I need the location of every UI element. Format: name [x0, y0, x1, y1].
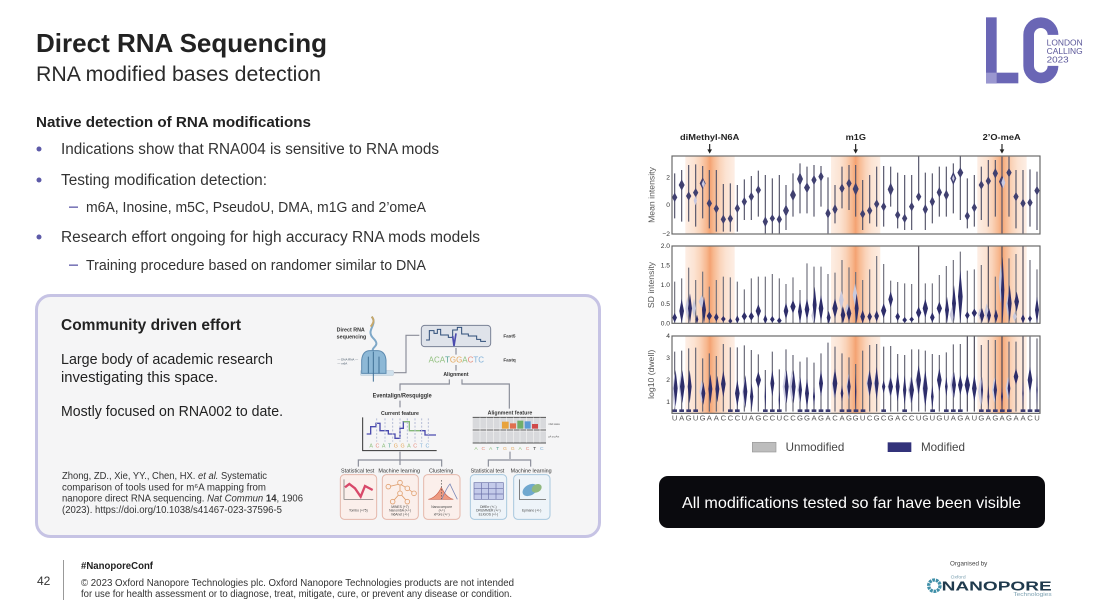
panel: community driven effort — [36, 296, 600, 536]
card: machine learning: m6Anet (+/-) — [391, 512, 409, 516]
logo: London Calling 2023: 2023 — [1047, 54, 1069, 64]
bullet: RNA004: Indications show that RNA004 is sensitive to RNA mods — [61, 141, 439, 158]
logo: London Calling 2023: LONDON — [1047, 38, 1083, 48]
label: current feature: Current feature — [381, 411, 419, 417]
axis ticks: −2 — [662, 231, 670, 238]
axis ticks: 2 — [666, 174, 670, 181]
card: machine learning: MINES (+7) — [391, 505, 409, 509]
footer: copyright: © 2023 Oxford Nanopore Technologies plc. Oxford Nanopore Technologies products are not intended — [81, 578, 514, 589]
legend: Modified — [921, 441, 965, 454]
chart: current feature: ACATGGACTC — [369, 443, 429, 449]
subtitle: RNA modified bases detection — [36, 63, 321, 86]
callout: All modifications tested so far have been visible — [682, 495, 1021, 512]
card: machine learning — [382, 475, 418, 519]
heading: native detection: Native detection of RNA modifications — [36, 114, 311, 131]
sub-bullet: mods tested: m6A, Inosine, m5C, PseudoU, DMA, m1G and 2’omeA — [86, 200, 426, 216]
sub-bullet: training: Training procedure based on randomer similar to DNA — [86, 258, 426, 274]
method labels: Clustering — [429, 469, 453, 475]
card: statistical test 2: DRUMMER (+/-) — [476, 509, 501, 513]
logo: Oxford Nanopore Technologies: Organised by — [950, 560, 988, 567]
label: Fast5: Fast5 — [503, 333, 516, 338]
chart: alignment feature: A C A T G G A C T C — [474, 446, 544, 452]
sequence: ACATGGACTC — [429, 355, 484, 364]
card: clustering: (+/-) — [439, 509, 445, 513]
axis ticks: 3 — [666, 355, 670, 362]
card: machine learning 2 — [514, 475, 550, 519]
branch arrows — [358, 452, 531, 467]
axis label: log10 (dwell) — [646, 350, 656, 399]
panel text: Mostly focused on RNA002 to date. — [61, 404, 283, 420]
citation: Zhong, ZD., Xie, YY., Chen, HX. et al. Systematic — [62, 471, 267, 482]
chart: violin plots by nucleotide — [646, 132, 1040, 454]
logo: London Calling 2023 — [986, 17, 1083, 83]
annotation labels with arrows: diMethyl-N6A — [680, 132, 739, 142]
footer: copyright — [81, 578, 514, 600]
callout — [659, 476, 1045, 528]
method labels: Statistical test — [341, 469, 375, 475]
citation: (2023). https://doi.org/10.1038/s41467-023-37596-5 — [62, 505, 283, 516]
chart: alignment feature — [473, 417, 561, 452]
citation: comparison of tools used for m⁶A mapping from — [62, 482, 266, 494]
label: alignment feature: Alignment feature — [488, 410, 532, 416]
footer: copyright: for use for health assessment or to diagnose, treat, mitigate, cure, or prevent any disease or condition. — [81, 589, 512, 600]
logo: Oxford Nanopore Technologies: Technologies — [1013, 592, 1052, 598]
method labels — [341, 469, 552, 475]
card: statistical test 2 — [470, 475, 507, 519]
legend — [752, 441, 965, 454]
axis ticks: 2.0 — [661, 243, 670, 250]
annotation labels with arrows: m1G — [846, 132, 866, 142]
panel heading: Community driven effort — [61, 317, 241, 334]
icon: pore with RNA strand — [337, 317, 393, 382]
panel: SD intensity — [646, 243, 1040, 327]
card: statistical test 2: DiffErr (+/-) — [480, 505, 497, 509]
diagram: tool workflow: sequencing — [337, 335, 366, 341]
diagram: direct RNA label: Direct RNA — [337, 327, 365, 333]
chart: current feature — [363, 417, 437, 451]
method labels: Machine learning — [511, 469, 552, 475]
axis ticks: 0.0 — [661, 320, 670, 327]
axis ticks — [661, 243, 670, 327]
annotation labels with arrows: 2’O-meA — [983, 132, 1021, 142]
card: clustering: xPore (+/-) — [434, 512, 450, 516]
logo: Oxford Nanopore Technologies: Oxford — [951, 574, 966, 580]
method labels: Machine learning — [378, 469, 420, 475]
logo: London Calling 2023: CALLING — [1047, 46, 1083, 56]
axis ticks: 0.5 — [661, 301, 670, 308]
logo: Oxford Nanopore Technologies: NANOPORE — [942, 579, 1052, 594]
card: clustering: Nanocompore — [431, 505, 452, 509]
bullet: research effort: Research effort ongoing for high accuracy RNA mods models — [61, 229, 480, 246]
citation — [62, 471, 304, 516]
chart: alignment feature: pA or pAm — [548, 435, 559, 438]
annotation labels with arrows — [680, 132, 1021, 154]
page number: 42 — [37, 574, 51, 588]
panel: mean intensity — [647, 156, 1040, 238]
icon: signal box Fast5 — [421, 325, 491, 347]
legend: Unmodified — [786, 441, 844, 454]
panel text: investigating this space. — [61, 370, 218, 386]
axis ticks: 4 — [666, 333, 670, 340]
sequence labels: UAGUGAACCCUAGCCUCCGGAGACAGGUCGCGACCUGUGUAGAUGAGAGAACU — [672, 413, 1040, 422]
card: machine learning 2: Epinano (+/-) — [522, 509, 541, 513]
title: Direct RNA Sequencing — [36, 28, 327, 58]
diagram: tool workflow — [337, 317, 561, 519]
logo: Oxford Nanopore Technologies — [929, 560, 1052, 598]
label: eventalign: Eventalign/Resquiggle — [373, 394, 432, 400]
card: clustering — [424, 475, 460, 519]
footer divider — [63, 560, 64, 600]
icon: pore with RNA strand: — DNA RNA — — [337, 358, 358, 362]
axis label: Mean intensity — [647, 166, 657, 223]
axis ticks: 1.5 — [661, 263, 670, 270]
icon: pore with RNA strand: — m6A — [337, 362, 347, 366]
label: alignment: Alignment — [443, 372, 469, 378]
footer: hashtag: #NanoporeConf — [81, 561, 154, 572]
citation: nanopore direct RNA sequencing. Nat Commun 14, 1906 — [62, 494, 304, 504]
axis label: SD intensity — [646, 261, 656, 308]
icon: nanopore ring — [929, 580, 940, 591]
text block: native detection bullets — [36, 114, 480, 274]
axis ticks: 2 — [666, 377, 670, 384]
axis ticks — [662, 174, 670, 238]
card: machine learning: Nanom6A (+/-) — [389, 509, 411, 513]
method labels: Statistical test — [471, 469, 505, 475]
axis ticks: 1 — [666, 399, 670, 406]
panel text: Large body of academic research — [61, 352, 273, 368]
workflow arrows top — [394, 335, 509, 409]
axis ticks: 0 — [666, 202, 670, 209]
panel: log10 dwell — [646, 333, 1040, 422]
card: statistical test — [340, 475, 377, 519]
label: Fastq: Fastq — [503, 358, 516, 363]
axis ticks: 1.0 — [661, 282, 670, 289]
chart: alignment feature: m6A status — [548, 423, 561, 426]
bullet: testing: Testing modification detection: — [61, 172, 267, 189]
card: statistical test 2: ELIGOS (+/-) — [479, 512, 498, 516]
panel text — [61, 352, 283, 420]
axis ticks — [666, 333, 670, 406]
card: statistical test: Tombo (+75) — [349, 509, 368, 513]
